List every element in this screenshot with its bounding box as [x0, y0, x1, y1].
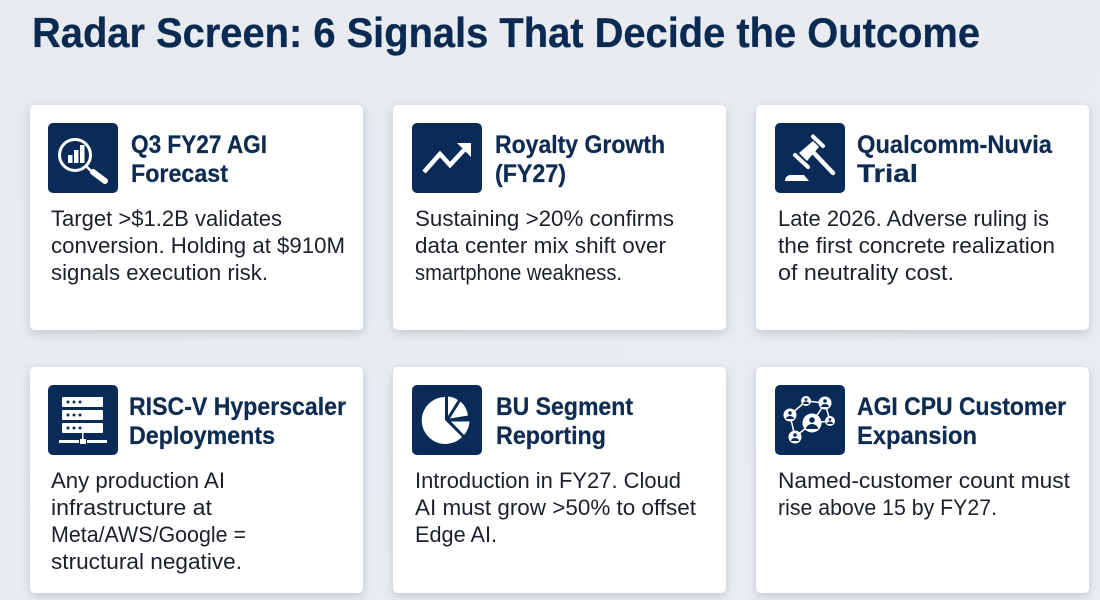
- body text: Edge AI.: [415, 522, 497, 547]
- body text: Target >$1.2B validates: [51, 206, 282, 231]
- body text: Late 2026. Adverse ruling is: [778, 206, 1049, 231]
- body text: conversion. Holding at $910M: [51, 233, 345, 258]
- heading: Reporting: [496, 422, 606, 450]
- body text: of neutrality cost.: [778, 260, 954, 285]
- icon: server rack: [48, 385, 118, 455]
- heading: [129, 393, 346, 450]
- body text: Named-customer count must: [778, 468, 1070, 493]
- icon: rising trend arrow: [412, 123, 482, 193]
- panel: BU Segment Reporting: [393, 367, 726, 593]
- heading: BU Segment: [496, 393, 634, 421]
- icon: magnifying glass with bars: [48, 123, 118, 193]
- body text: the first concrete realization: [778, 233, 1055, 258]
- body text: signals execution risk.: [51, 260, 268, 285]
- body text: Introduction in FY27. Cloud: [415, 468, 681, 493]
- body text: infrastructure at: [51, 495, 212, 520]
- heading: (FY27): [495, 160, 566, 188]
- heading: [857, 393, 1066, 450]
- heading: Q3 FY27 AGI: [131, 131, 267, 159]
- title: Radar Screen: 6 Signals That Decide the Outcome: [32, 9, 980, 56]
- body text: [415, 206, 674, 285]
- body text: structural negative.: [51, 549, 242, 574]
- panel: AGI CPU Customer Expansion: [756, 367, 1089, 593]
- icon: gavel: [775, 123, 845, 193]
- panel: RISC-V Hyperscaler Deployments: [30, 367, 363, 593]
- body text: [778, 468, 1070, 520]
- heading: Forecast: [131, 160, 229, 188]
- body text: Meta/AWS/Google =: [51, 522, 246, 547]
- body text: smartphone weakness.: [415, 260, 622, 285]
- heading: RISC-V Hyperscaler: [129, 393, 346, 421]
- body text: [415, 468, 696, 547]
- body text: Any production AI: [51, 468, 225, 493]
- body text: rise above 15 by FY27.: [778, 495, 997, 520]
- heading: Deployments: [129, 422, 275, 450]
- body text: [778, 206, 1055, 285]
- heading: Royalty Growth: [495, 131, 665, 159]
- body text: [51, 468, 246, 574]
- heading: [857, 131, 1053, 188]
- heading: [495, 131, 665, 188]
- panel: Q3 FY27 AGI Forecast: [30, 105, 363, 330]
- heading: Qualcomm-Nuvia: [857, 131, 1053, 159]
- heading: [131, 131, 267, 188]
- icon: customer network: [775, 385, 845, 455]
- body text: data center mix shift over: [415, 233, 666, 258]
- icon: pie chart: [412, 385, 482, 455]
- body text: [51, 206, 345, 285]
- heading: AGI CPU Customer: [857, 393, 1066, 421]
- panel: Royalty Growth: [393, 105, 726, 330]
- body text: AI must grow >50% to offset: [415, 495, 696, 520]
- heading: Trial: [857, 160, 918, 188]
- body text: Sustaining >20% confirms: [415, 206, 674, 231]
- panel: Qualcomm-Nuvia Trial: [756, 105, 1089, 330]
- heading: Expansion: [857, 422, 977, 450]
- heading: [496, 393, 634, 450]
